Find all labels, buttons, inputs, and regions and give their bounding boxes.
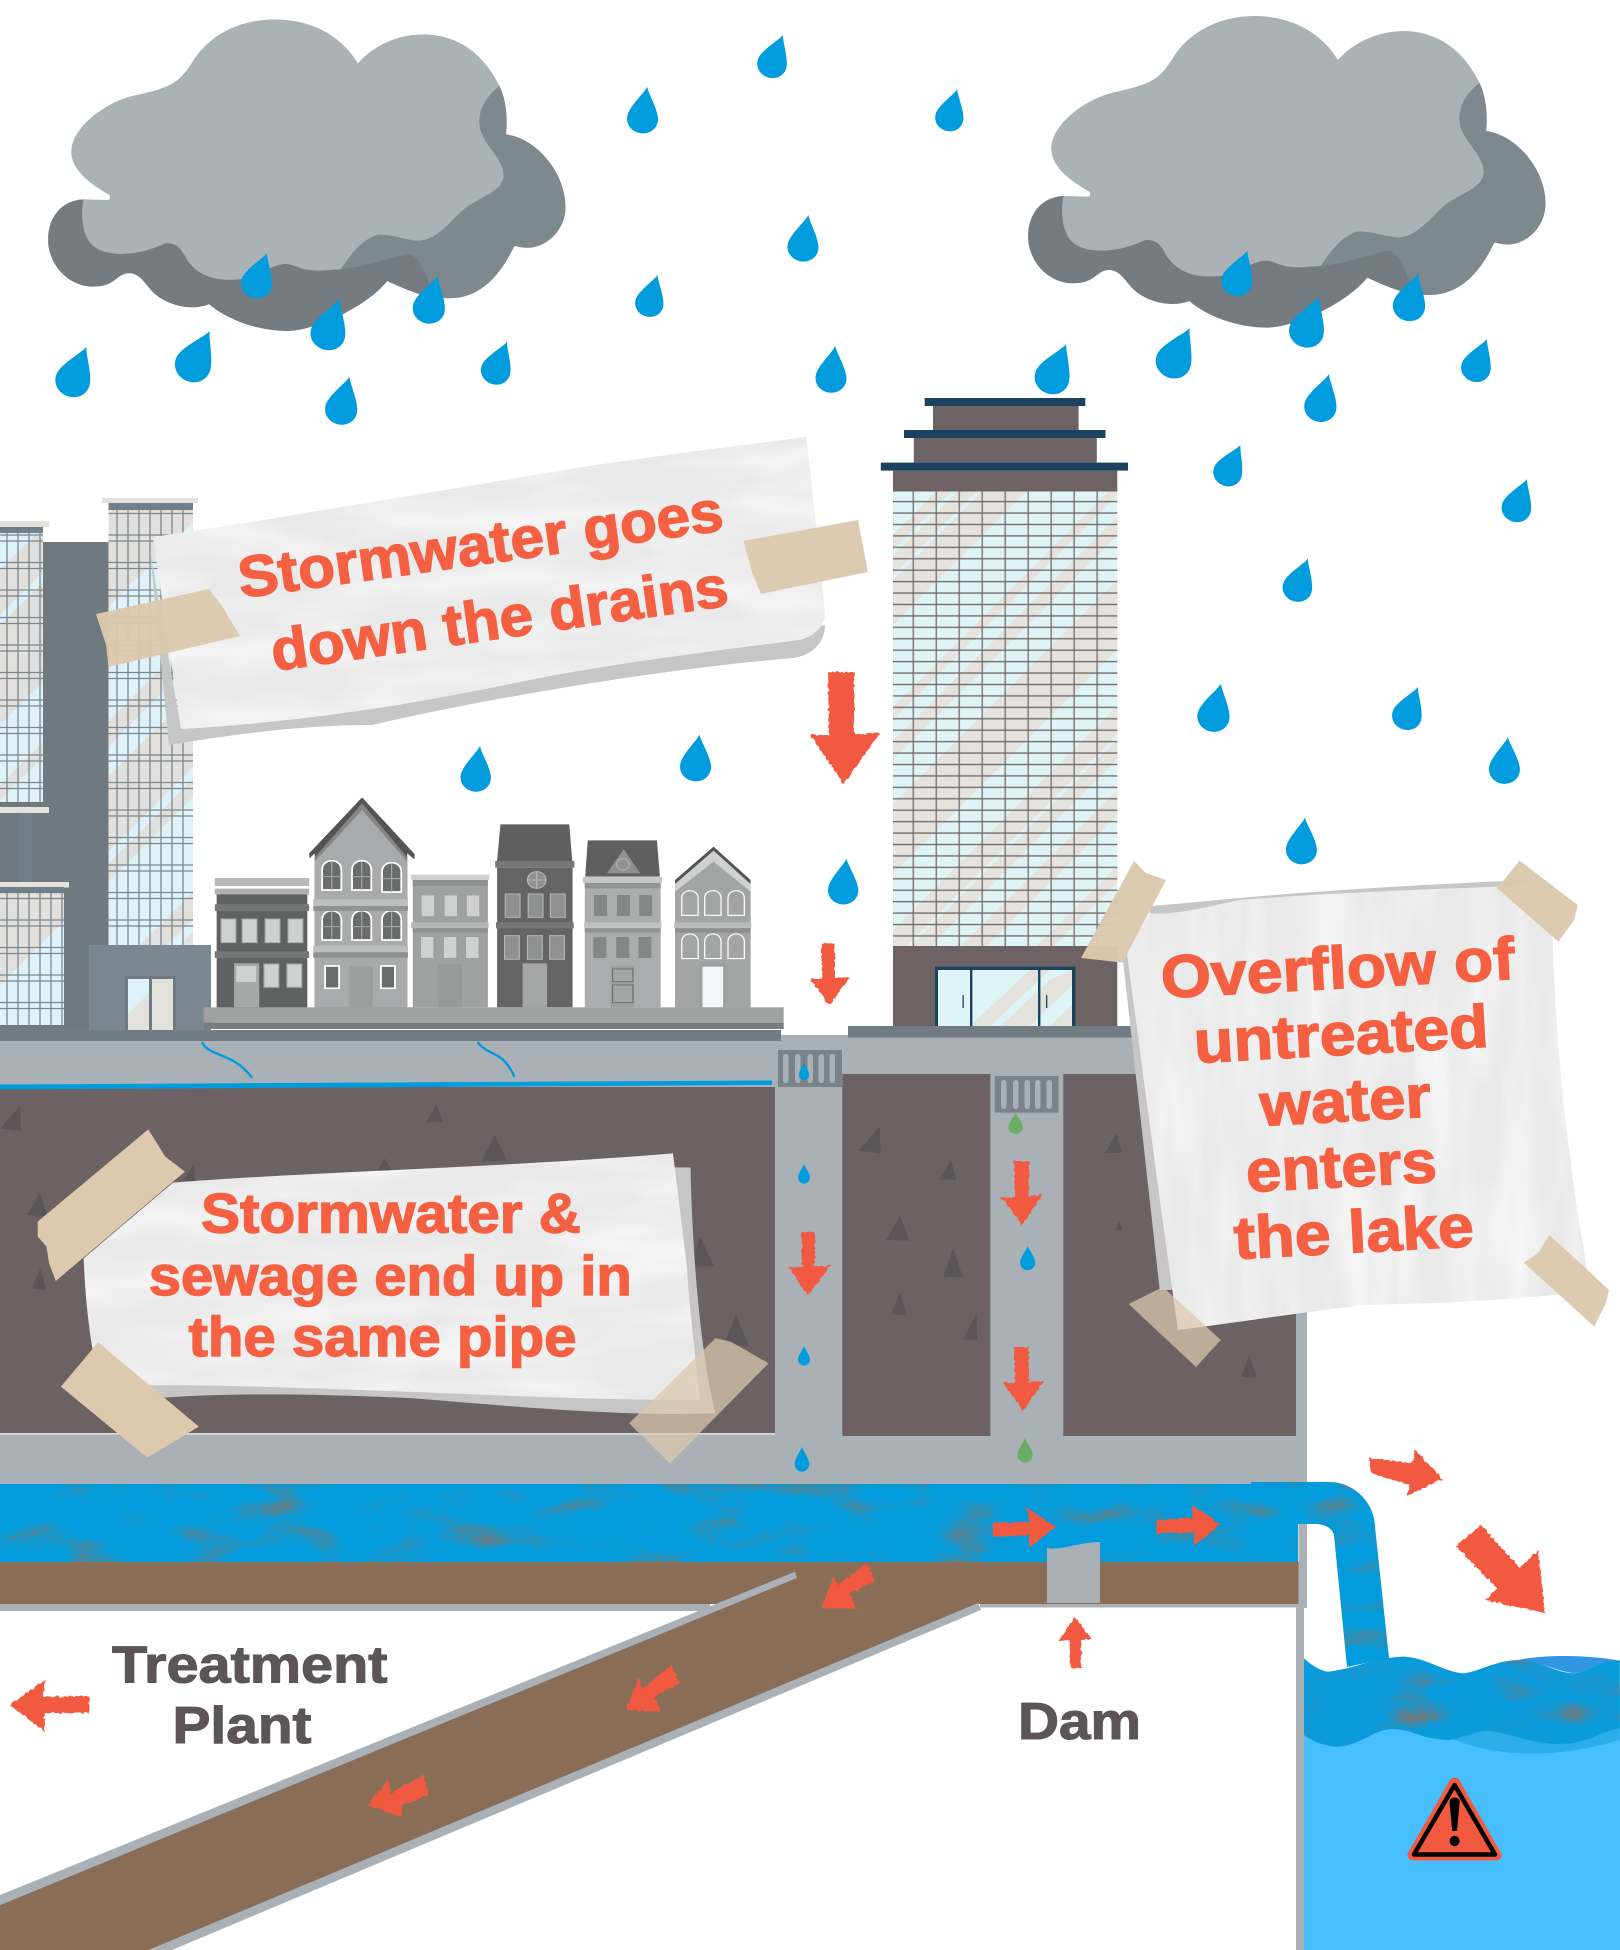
storm drain grate 2	[995, 1076, 1058, 1113]
red flow arrows	[10, 672, 1545, 1817]
dam	[1047, 1542, 1100, 1603]
blue combined pipe with elbow	[0, 1482, 1389, 1667]
tape: top-left	[38, 1129, 185, 1281]
heading line 1: Stormwater &	[201, 1182, 581, 1245]
house 2: gabled grey	[309, 797, 415, 1007]
tape: left	[96, 589, 240, 667]
label: Treatment Plant: Treatment	[112, 1637, 388, 1695]
sewage drops in drain shaft	[1008, 1113, 1033, 1462]
heading line: untreated: untreated	[1192, 993, 1490, 1076]
arrow: to treatment plant	[10, 1680, 89, 1732]
heading line: the lake: the lake	[1232, 1192, 1475, 1272]
arrow: large down beside tower	[810, 672, 880, 784]
house 5: dormer roof	[583, 840, 662, 1007]
street and ground	[0, 1026, 1307, 1484]
brown grime speckle in polluted water	[0, 1480, 1620, 1770]
blue water seeping through cracks	[202, 1042, 514, 1078]
underground soil blocks	[0, 1074, 1296, 1436]
arrow: down shaft two lower	[1003, 1347, 1044, 1411]
sidewalk under houses	[204, 1007, 784, 1029]
note: stormwater goes down the drains	[96, 430, 868, 745]
retaining wall	[1296, 1524, 1307, 1950]
heading line 2: sewage end up in	[149, 1244, 632, 1307]
warning sign	[1413, 1783, 1496, 1855]
tower glass doors	[935, 967, 1076, 1026]
label: Treatment Plant	[112, 1637, 388, 1755]
arrow: pipe flow right one	[993, 1507, 1056, 1548]
arrow: down sewage pipe three	[367, 1775, 429, 1817]
tape: bottom-right	[1524, 1235, 1609, 1327]
heading: down the drains: down the drains	[267, 554, 732, 684]
arrow: points up to dam	[1058, 1617, 1092, 1668]
storm drain grate 1	[778, 1050, 842, 1087]
heading line: Overflow of: Overflow of	[1159, 925, 1517, 1011]
house 1: dark brick	[215, 878, 309, 1008]
heading: stormwater goes: Stormwater goes	[234, 478, 727, 611]
lake	[1304, 1656, 1620, 1950]
central glass skyscraper	[880, 398, 1128, 1026]
stormwater surface line	[0, 1080, 772, 1090]
tape: bottom-right	[629, 1338, 769, 1463]
tape: top-right	[1497, 861, 1578, 942]
cloud: left storm cloud	[48, 19, 566, 331]
heading line 3: the same pipe	[188, 1305, 576, 1368]
left tower	[0, 521, 49, 813]
tape: bottom-left	[1129, 1287, 1221, 1367]
heading line: water: water	[1257, 1063, 1432, 1139]
arrow: down sewage pipe one	[821, 1563, 875, 1609]
arrow: small down beside tower	[810, 943, 850, 1006]
row houses	[215, 797, 751, 1008]
arrow: outflow to lake	[1456, 1525, 1545, 1613]
arrow: outflow right	[1370, 1450, 1443, 1496]
glass tower behind the note	[102, 498, 198, 945]
house 6: arched windows	[674, 847, 751, 1007]
office buildings on the left	[0, 498, 211, 1030]
lobby entrance	[89, 945, 211, 1030]
lower left block	[0, 882, 69, 1025]
note: overflow of untreated water enters the lake	[1081, 861, 1609, 1370]
tape: bottom-left	[61, 1342, 199, 1458]
cloud: right storm cloud	[1028, 16, 1546, 328]
arrow: down shaft one	[788, 1232, 830, 1296]
label: Treatment Plant: Plant	[172, 1697, 312, 1755]
house 4: dark with mansard roof	[495, 824, 574, 1007]
highlight line under soil	[0, 1433, 775, 1435]
arrow: pipe flow right two	[1157, 1505, 1221, 1546]
brown sewage pipe to treatment plant	[0, 1562, 1305, 1950]
tape: top-left	[1081, 861, 1166, 963]
stormwater drops in drain shafts	[795, 1063, 1035, 1472]
rain drops falling from the clouds	[50, 30, 1541, 906]
tape: right	[744, 520, 868, 594]
arrow: down sewage pipe two	[626, 1665, 680, 1712]
decorative soil rocks	[0, 1105, 1257, 1378]
heading line: enters: enters	[1244, 1128, 1438, 1205]
label: Dam: Dam	[1018, 1693, 1141, 1751]
house 3: light flat	[411, 875, 489, 1007]
note: stormwater and sewage in the same pipe	[38, 1129, 769, 1463]
arrow: down shaft two upper	[1001, 1161, 1042, 1225]
